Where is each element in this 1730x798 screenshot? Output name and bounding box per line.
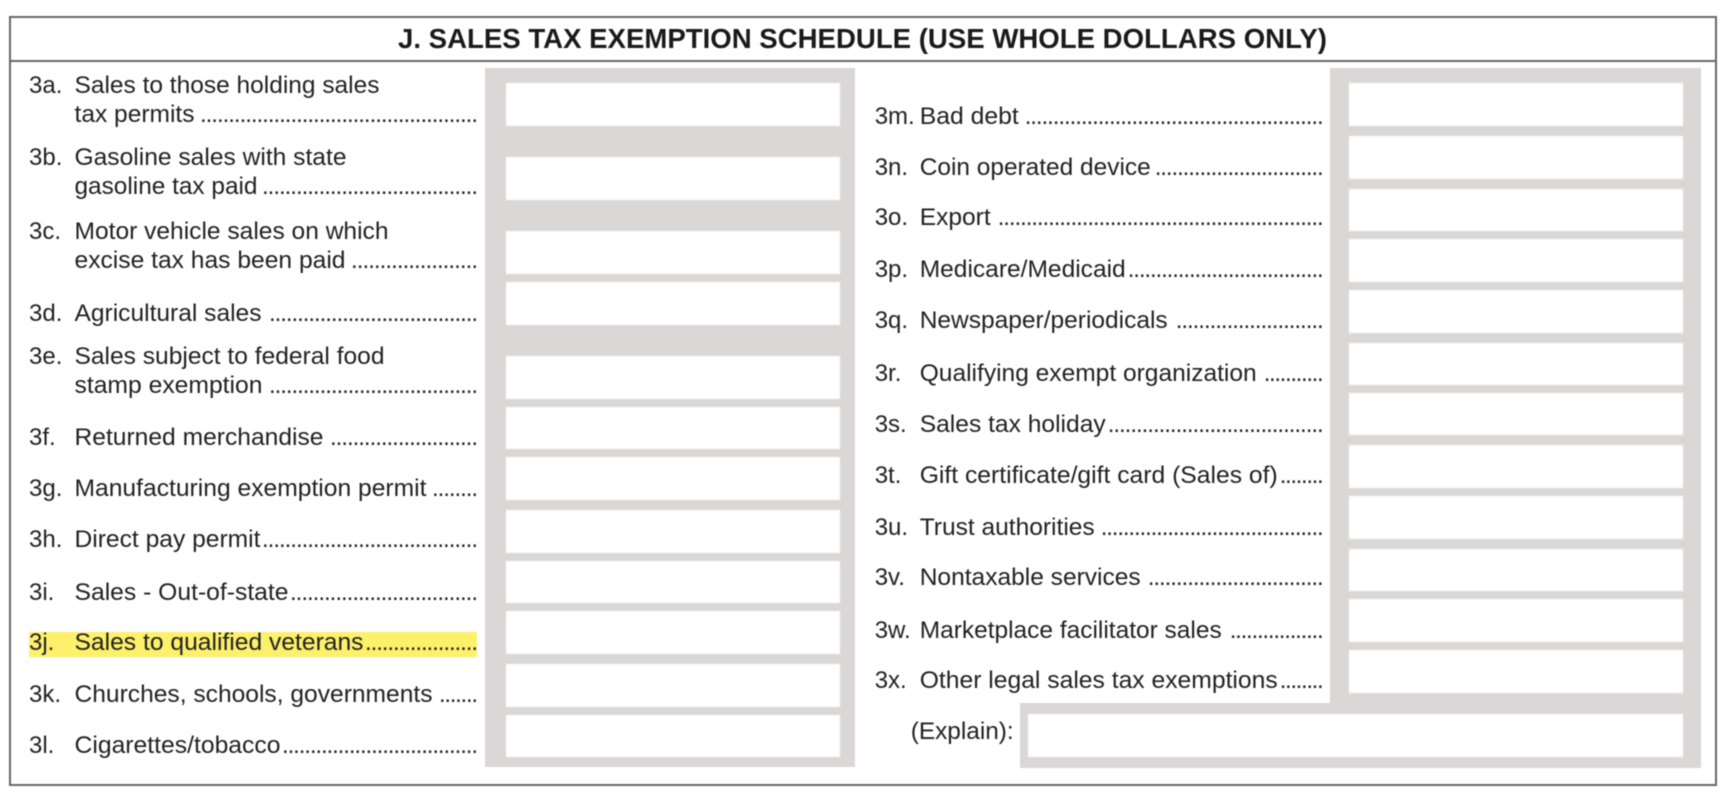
line 3t: 3t. xyxy=(875,462,901,489)
line 3s xyxy=(875,411,1324,438)
line 3i: Sales - Out-of-state xyxy=(74,579,288,606)
highlighted line 3j: .................... xyxy=(365,629,478,656)
line 3d: 3d. xyxy=(29,300,62,327)
panel: right entry boxes xyxy=(1020,68,1701,768)
line 3k: Churches, schools, governments xyxy=(74,681,432,708)
line 3e: ..................................... xyxy=(269,372,478,399)
line 3p: 3p. xyxy=(875,256,908,283)
line 3f: 3f. xyxy=(29,424,56,451)
line 3a: ................................................. xyxy=(200,101,478,128)
line 3d xyxy=(29,300,478,327)
line 3c xyxy=(29,218,478,274)
line 3p xyxy=(875,256,1324,283)
line 3o: Export xyxy=(920,204,991,231)
title: J. SALES TAX EXEMPTION SCHEDULE (USE WHOLE DOLLARS ONLY) xyxy=(398,23,1327,54)
line 3n: .............................. xyxy=(1155,154,1324,181)
line 3i xyxy=(29,579,478,606)
line 3r: ........... xyxy=(1264,360,1324,387)
line 3q: .......................... xyxy=(1176,307,1324,334)
line 3i: 3i. xyxy=(29,579,54,606)
line 3g: Manufacturing exemption permit xyxy=(74,475,427,502)
line 3n xyxy=(875,154,1324,181)
line 3c: Motor vehicle sales on which xyxy=(74,218,389,245)
panel: left entry boxes xyxy=(485,68,855,767)
line 3c: excise tax has been paid xyxy=(74,247,346,274)
line 3h: ...................................... xyxy=(262,526,478,553)
line 3q: Newspaper/periodicals xyxy=(920,307,1168,334)
line 3e: Sales subject to federal food xyxy=(74,343,384,370)
line 3l xyxy=(29,732,478,759)
line 3b xyxy=(29,144,478,200)
line 3g: 3g. xyxy=(29,475,62,502)
line 3c: ...................... xyxy=(351,247,478,274)
line 3u: ........................................ xyxy=(1101,514,1324,541)
line 3u xyxy=(875,514,1324,541)
line 3s: 3s. xyxy=(875,411,907,438)
line 3b: ...................................... xyxy=(262,173,478,200)
line 3h: Direct pay permit xyxy=(74,526,261,553)
line 3u: Trust authorities xyxy=(920,514,1095,541)
line 3b: 3b. xyxy=(29,144,62,171)
line 3w: Marketplace facilitator sales xyxy=(920,617,1222,644)
line 3r: 3r. xyxy=(875,360,901,387)
line 3b: Gasoline sales with state xyxy=(74,144,346,171)
line 3u: 3u. xyxy=(875,514,908,541)
line 3h xyxy=(29,526,478,553)
line 3q: 3q. xyxy=(875,307,908,334)
line 3w xyxy=(875,617,1324,644)
line 3n: 3n. xyxy=(875,154,908,181)
line 3a xyxy=(29,72,478,128)
line 3v: ............................... xyxy=(1148,564,1324,591)
line 3e: stamp exemption xyxy=(74,372,262,399)
highlighted line 3j xyxy=(29,629,478,657)
line 3i: ................................. xyxy=(290,579,478,606)
line 3r: Qualifying exempt organization xyxy=(920,360,1257,387)
line 3w: ................. xyxy=(1230,617,1324,644)
line 3q xyxy=(875,307,1324,334)
line 3p: Medicare/Medicaid xyxy=(920,256,1126,283)
line 3l: Cigarettes/tobacco xyxy=(74,732,280,759)
highlighted line 3j: 3j. xyxy=(29,629,54,656)
line 3m: Bad debt xyxy=(920,103,1019,130)
line 3c: 3c. xyxy=(29,218,61,245)
line 3n: Coin operated device xyxy=(920,154,1151,181)
line 3k: 3k. xyxy=(29,681,61,708)
explain label: (Explain): xyxy=(911,718,1014,745)
line 3s: Sales tax holiday xyxy=(920,411,1106,438)
line 3e xyxy=(29,343,478,399)
right column lines xyxy=(875,103,1324,745)
line 3f: Returned merchandise xyxy=(74,424,324,451)
line 3a: tax permits xyxy=(74,101,194,128)
line 3t: Gift certificate/gift card (Sales of) xyxy=(920,462,1278,489)
line 3x: Other legal sales tax exemptions xyxy=(920,667,1278,694)
line 3v xyxy=(875,564,1324,591)
line 3l: 3l. xyxy=(29,732,54,759)
line 3l: ................................... xyxy=(282,732,478,759)
line 3a: 3a. xyxy=(29,72,62,99)
line 3h: 3h. xyxy=(29,526,62,553)
line 3m xyxy=(875,103,1324,130)
line 3v: 3v. xyxy=(875,564,905,591)
line 3e: 3e. xyxy=(29,343,62,370)
line 3k: ....... xyxy=(439,681,478,708)
line 3x: ........ xyxy=(1280,667,1324,694)
highlighted line 3j: Sales to qualified veterans xyxy=(74,629,364,656)
line 3f: .......................... xyxy=(330,424,478,451)
line 3a: Sales to those holding sales xyxy=(74,72,380,99)
line 3m: 3m. xyxy=(875,103,915,130)
line 3t: ........ xyxy=(1280,462,1324,489)
line 3v: Nontaxable services xyxy=(920,564,1141,591)
line 3d: ..................................... xyxy=(269,300,478,327)
line 3g: ........ xyxy=(432,475,478,502)
line 3o: 3o. xyxy=(875,204,908,231)
line 3x: 3x. xyxy=(875,667,907,694)
line 3w: 3w. xyxy=(875,617,911,644)
line 3f xyxy=(29,424,478,451)
line 3p: ................................... xyxy=(1128,256,1324,283)
line 3b: gasoline tax paid xyxy=(74,173,258,200)
line 3d: Agricultural sales xyxy=(74,300,262,327)
line 3m: ..................................................... xyxy=(1025,103,1324,130)
line 3s: ...................................... xyxy=(1108,411,1324,438)
line 3o: .......................................................... xyxy=(998,204,1324,231)
